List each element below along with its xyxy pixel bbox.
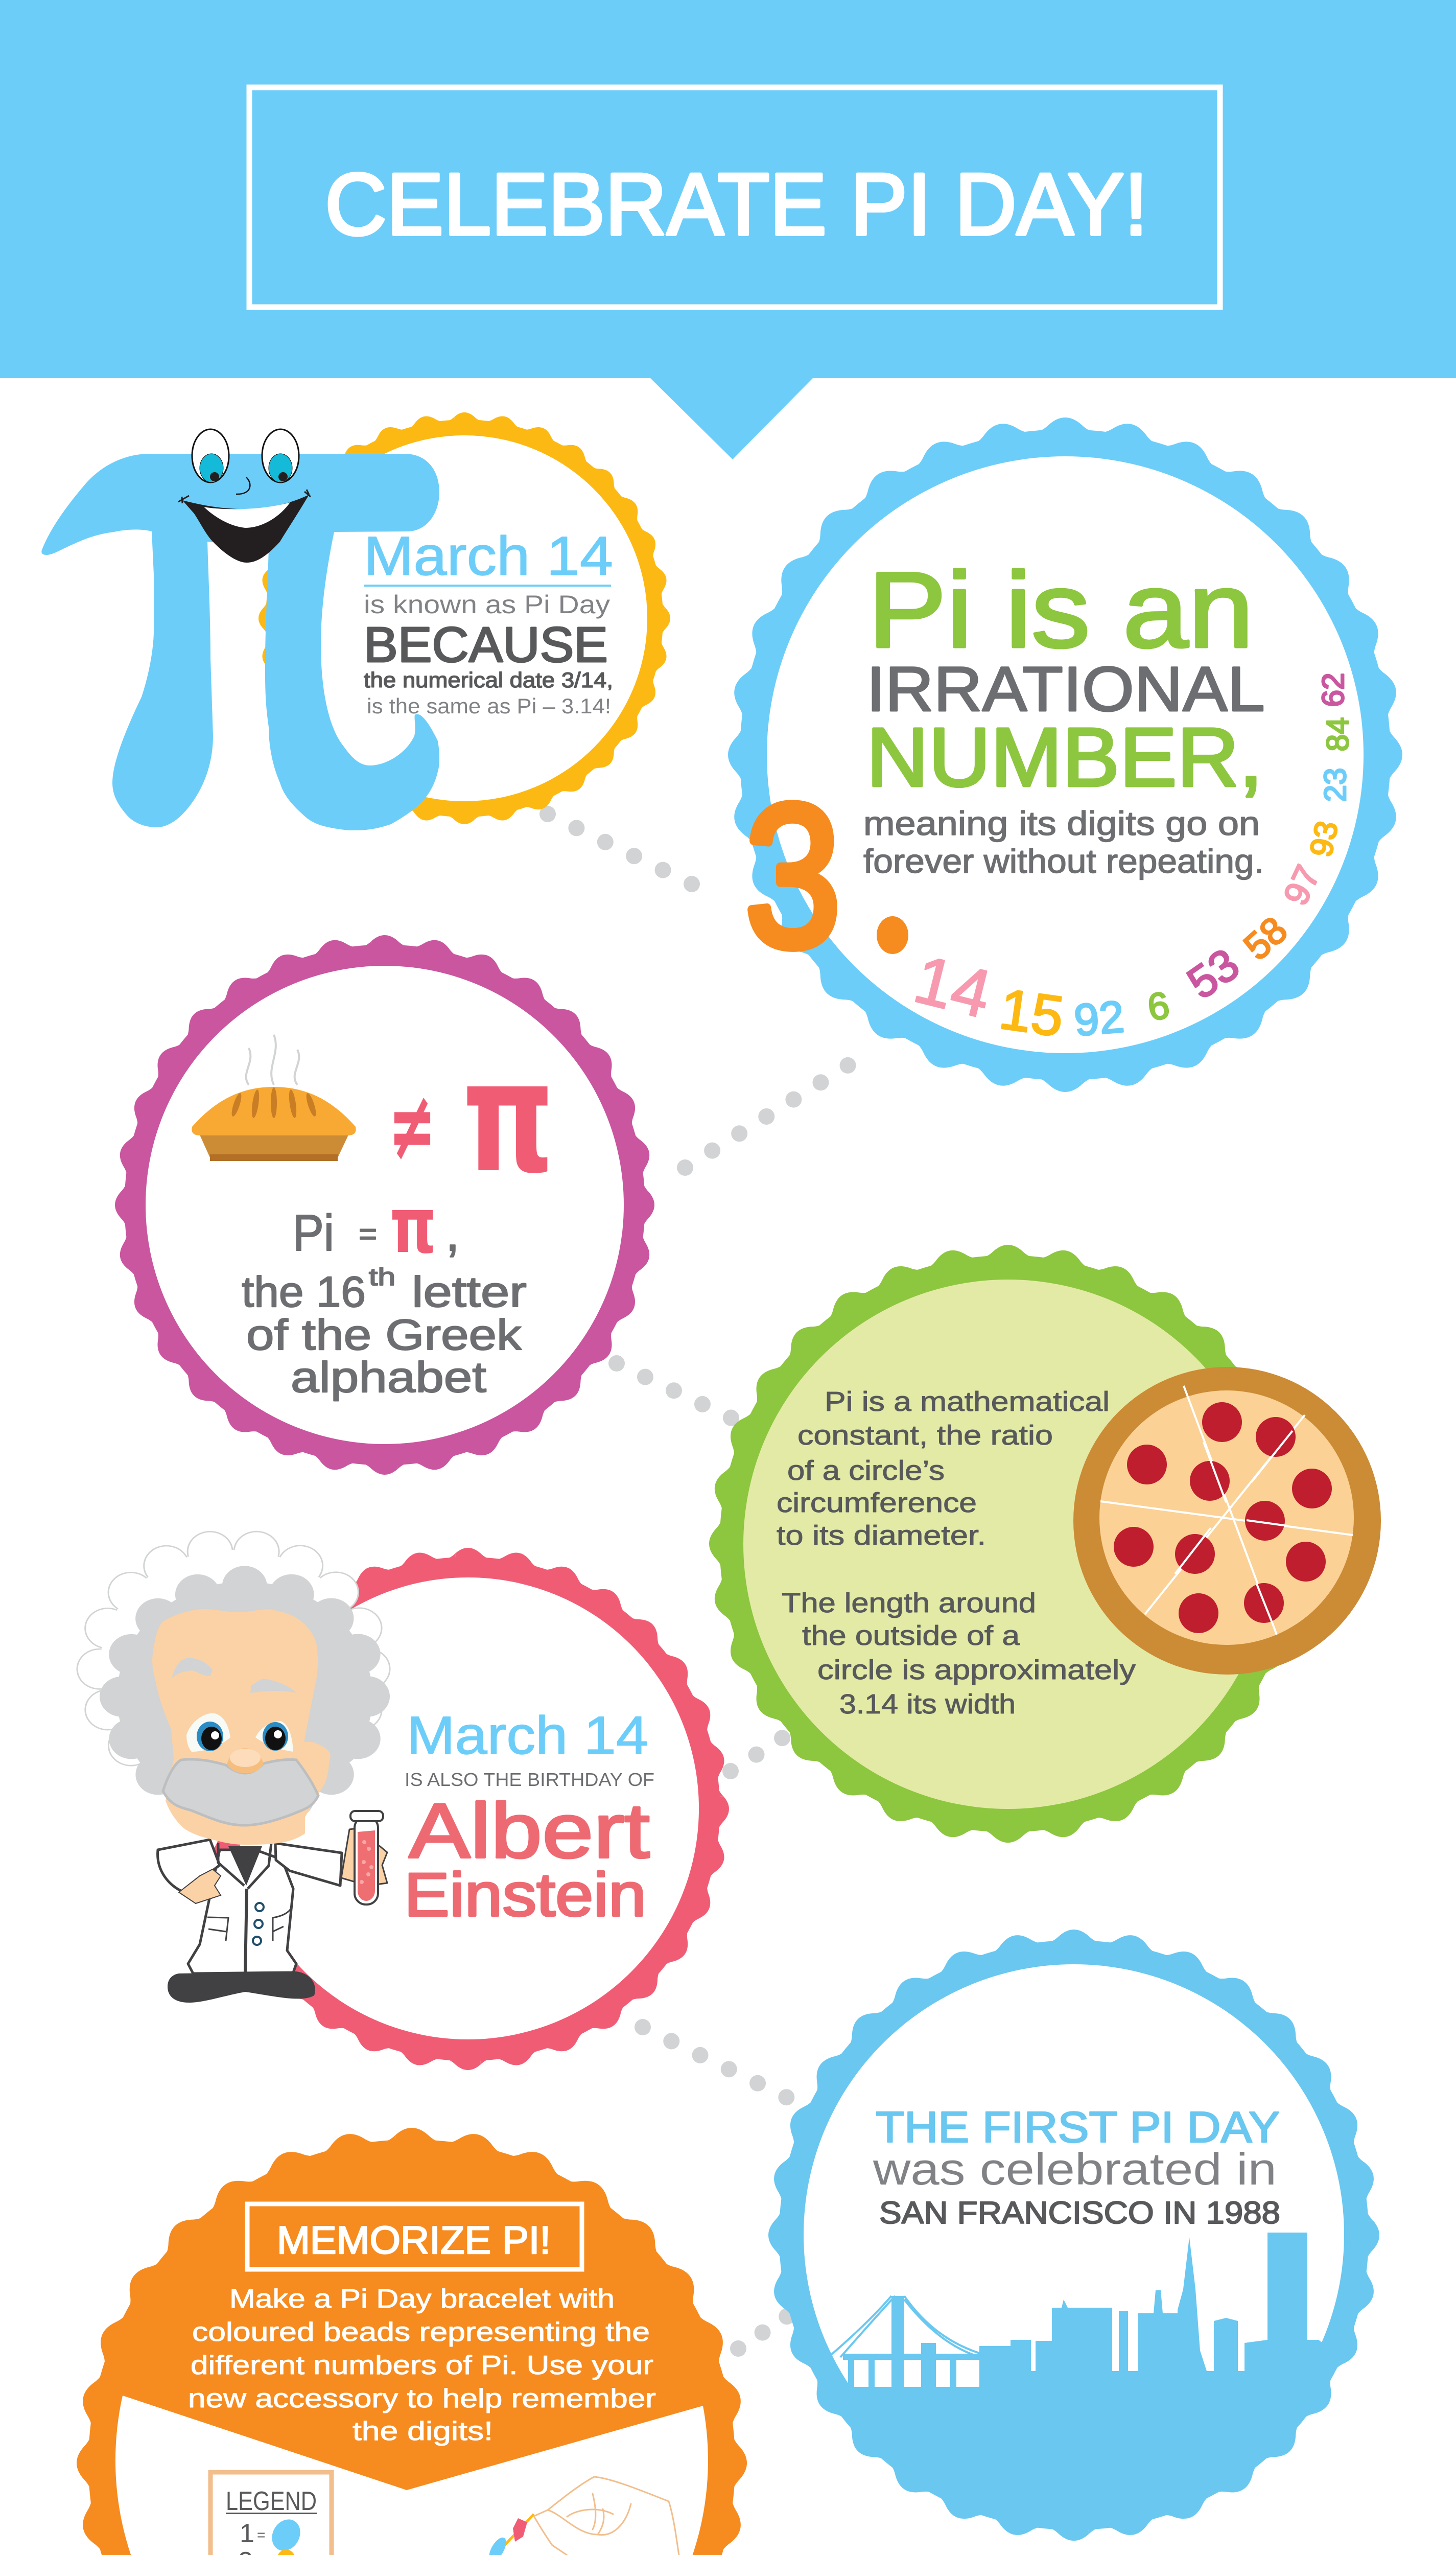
constant text: of a circle’s	[787, 1455, 945, 1486]
Memorize description: coloured beads representing the	[192, 2317, 650, 2347]
Memorize description: different numbers of Pi. Use your	[191, 2351, 653, 2380]
panel: Einstein birthday: March 14	[407, 1706, 648, 1766]
mascot mouth	[178, 490, 311, 563]
constant text: to its diameter.	[777, 1520, 986, 1551]
digits of pi along the curve: 97	[1276, 860, 1328, 911]
panel: Pi is an irrational number	[728, 417, 1402, 1092]
test tube	[341, 1811, 387, 1904]
panel: Einstein birthday: IS ALSO THE BIRTHDAY OF	[405, 1769, 654, 1790]
panel: Einstein birthday: Einstein	[404, 1861, 646, 1929]
digits of pi along the curve: 23	[1318, 768, 1352, 802]
panel: Pi is an irrational number: meaning its digits go on	[863, 804, 1260, 842]
definition text: the 16	[242, 1268, 366, 1316]
definition text: ,	[445, 1204, 460, 1262]
digits of pi along the curve: 62	[1316, 673, 1350, 707]
constant text: circle is approximately	[817, 1655, 1136, 1685]
not equal sign and pi symbol: ≠	[388, 1069, 436, 1182]
constant text: circumference	[777, 1488, 977, 1518]
definition text: th	[369, 1264, 395, 1291]
panel: March 14 known as Pi Day: is known as Pi Day	[364, 590, 610, 619]
panel: Pi is an irrational number: Pi is an	[868, 550, 1254, 670]
panel: first Pi Day San Francisco: was celebrated in	[873, 2144, 1277, 2194]
panel: March 14 known as Pi Day: March 14	[364, 525, 613, 587]
Memorize description: new accessory to help remember	[188, 2384, 656, 2413]
header band	[0, 0, 1456, 459]
panel: Pi is a mathematical constant	[709, 1245, 1381, 1843]
constant text: constant, the ratio	[797, 1420, 1053, 1451]
panel: March 14 known as Pi Day: is the same as Pi – 3.14!	[367, 694, 611, 718]
panel: Einstein birthday: Albert	[409, 1787, 650, 1874]
constant text: the outside of a	[802, 1620, 1020, 1651]
bead legend: =	[257, 2527, 265, 2543]
constant text	[777, 1386, 1136, 1720]
digit 3 and decimal point	[745, 762, 908, 988]
panel: first Pi Day San Francisco: SAN FRANCISCO IN 1988	[879, 2195, 1280, 2230]
constant text: Pi is a mathematical	[825, 1386, 1110, 1417]
digits of pi along the curve	[907, 673, 1355, 1049]
icon: steaming pie	[192, 1035, 356, 1161]
definition text: Pi	[293, 1204, 334, 1262]
panel: Einstein birthday	[207, 1548, 729, 2070]
Memorize description	[188, 2284, 656, 2446]
definition text: of the Greek	[246, 1311, 522, 1359]
digits of pi along the curve: 6	[1144, 983, 1172, 1029]
digits of pi along the curve: 53	[1178, 938, 1248, 1009]
bead legend: LEGEND	[226, 2487, 317, 2516]
not equal sign and pi symbol	[388, 1028, 554, 1206]
title box	[249, 87, 1220, 307]
illustration: smiling pi mascot	[41, 429, 439, 830]
constant text: 3.14 its width	[839, 1689, 1016, 1720]
panel: Pi is an irrational number: NUMBER,	[866, 710, 1263, 804]
panel: Memorize Pi activity	[77, 2128, 747, 2555]
panel: Pi is not pie	[115, 935, 654, 1475]
panel: first Pi Day San Francisco: THE FIRST PI DAY	[876, 2103, 1280, 2152]
digit 3 and decimal point: 3	[745, 762, 841, 988]
panel: March 14 known as Pi Day: BECAUSE	[364, 617, 608, 672]
Memorize heading box	[247, 2204, 582, 2269]
panel: March 14 known as Pi Day: the numerical date 3/14,	[364, 668, 613, 692]
bracelet and hands	[348, 2477, 680, 2555]
panel: March 14 known as Pi Day	[259, 412, 670, 824]
digits of pi along the curve: 14	[907, 941, 998, 1032]
Einstein body and lab coat	[158, 1840, 342, 2003]
digits of pi along the curve: 15	[996, 977, 1068, 1049]
definition text: alphabet	[291, 1353, 486, 1401]
Memorize description: the digits!	[353, 2417, 493, 2446]
not equal sign and pi symbol: π	[462, 1028, 554, 1206]
panel: Pi is an irrational number: IRRATIONAL	[866, 654, 1265, 725]
Memorize heading box: MEMORIZE PI!	[277, 2219, 551, 2262]
illustration: Einstein character	[100, 1550, 387, 2003]
digits of pi along the curve: 84	[1321, 717, 1355, 751]
definition text: letter	[412, 1268, 527, 1316]
title box: CELEBRATE PI DAY!	[325, 155, 1148, 253]
icon: pepperoni pizza	[1073, 1367, 1381, 1675]
San Francisco skyline	[831, 2233, 1322, 2505]
constant text: The length around	[782, 1588, 1036, 1618]
definition text	[242, 1181, 527, 1401]
panel: first Pi Day San Francisco	[766, 1930, 1379, 2555]
bead legend	[210, 2472, 332, 2555]
definition text: =	[359, 1217, 377, 1251]
digits of pi along the curve: 93	[1303, 818, 1345, 860]
Einstein head and face	[152, 1609, 331, 1845]
bead legend: 1	[240, 2519, 254, 2548]
definition text: π	[390, 1181, 436, 1270]
mascot eyes	[192, 429, 299, 482]
panel: Pi is an irrational number: forever without repeating.	[863, 842, 1264, 880]
digits of pi along the curve: 58	[1236, 909, 1295, 968]
digits of pi along the curve: 92	[1072, 991, 1126, 1046]
Memorize description: Make a Pi Day bracelet with	[229, 2284, 615, 2314]
Einstein hair	[100, 1550, 372, 1811]
dotted connector lines	[425, 814, 849, 2555]
